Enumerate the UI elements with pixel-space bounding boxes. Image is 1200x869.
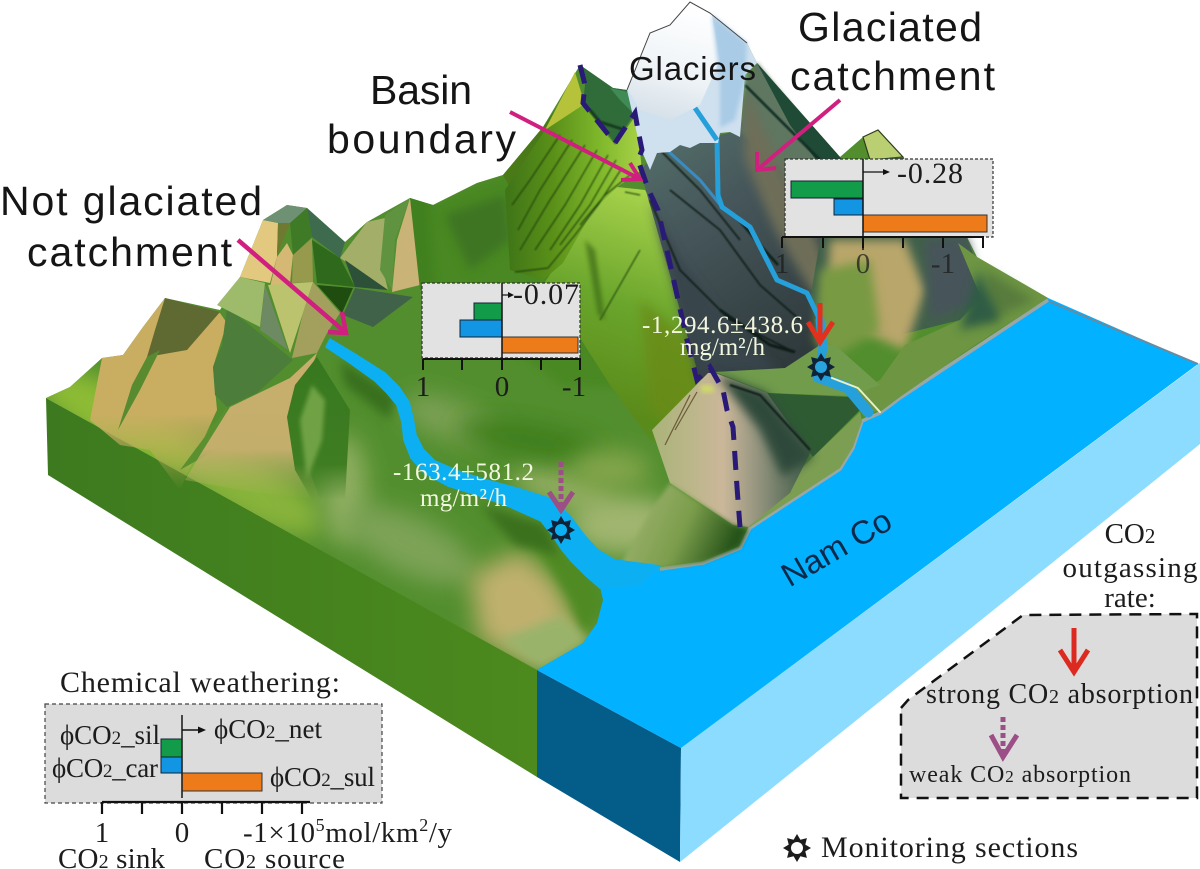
dark ridge lines bbox=[650, 85, 840, 352]
legend: chemical weathering: ϕCO2_net bbox=[214, 714, 322, 744]
chart: glaciated catchment weathering: -0.28 bbox=[897, 157, 963, 190]
heading: basin boundary: boundary bbox=[327, 116, 516, 162]
heading: glaciated catchment: catchment bbox=[790, 53, 996, 99]
legend: chemical weathering: 5 bbox=[316, 815, 325, 835]
slope gullies bbox=[512, 135, 640, 320]
land base bbox=[46, 2, 1048, 670]
heading: not glaciated catchment: Not glaciated bbox=[0, 178, 262, 224]
label: glaciated catchment CO2 rate: mg/m²/h bbox=[680, 334, 766, 361]
heading: glaciated catchment bbox=[790, 4, 996, 99]
heading: not glaciated catchment bbox=[0, 178, 262, 275]
heading: glaciated catchment: Glaciated bbox=[798, 4, 982, 50]
upper faceted peaks behind the river source bbox=[217, 198, 500, 358]
light blue right lake face bbox=[680, 363, 1200, 862]
central green mountain bbox=[430, 65, 700, 450]
icon: monitoring section star, not glaciated bbox=[547, 516, 575, 544]
legend: CO2 outgassing rate: CO2 bbox=[1105, 518, 1155, 550]
legend: monitoring sections: Monitoring sections bbox=[821, 831, 1078, 864]
left soil face bbox=[46, 398, 538, 777]
label: glaciated catchment CO2 rate: -1,294.6±438.6 bbox=[642, 312, 803, 339]
chart: glaciated catchment weathering: 0 bbox=[856, 248, 870, 280]
arrow: basin boundary bbox=[510, 112, 640, 180]
legend: chemical weathering: mol/km bbox=[325, 817, 419, 849]
panel: block side faces and lake bbox=[46, 298, 1200, 862]
label: not glaciated catchment CO2 rate bbox=[393, 459, 534, 512]
label: not glaciated catchment CO2 rate: -163.4±581.2 bbox=[393, 459, 534, 486]
legend: chemical weathering bbox=[45, 666, 452, 869]
front foothill bbox=[652, 373, 862, 527]
chart: glaciated catchment weathering: 1 bbox=[775, 248, 789, 280]
icon: weak absorption arrow on river bbox=[549, 462, 573, 510]
lake shore line bbox=[660, 300, 1048, 569]
legend: chemical weathering: 0 bbox=[175, 817, 189, 849]
glaciated mountain body bbox=[640, 63, 880, 380]
chart: not glaciated catchment weathering: -1 bbox=[562, 371, 586, 403]
heading: not glaciated catchment: catchment bbox=[27, 229, 233, 275]
lake surface bbox=[537, 298, 1198, 748]
legend: CO2 outgassing rate: rate: bbox=[1104, 582, 1156, 614]
label: not glaciated catchment CO2 rate: mg/m²/h bbox=[420, 485, 508, 512]
legend: chemical weathering: Chemical weathering: bbox=[60, 666, 340, 699]
arrow: glaciated catchment bbox=[757, 100, 840, 170]
river: not glaciated catchment bbox=[326, 339, 660, 588]
legend: chemical weathering: 2 bbox=[419, 815, 428, 835]
panel: terrain bbox=[22, 2, 1048, 670]
legend: CO2 outgassing rate bbox=[901, 518, 1198, 798]
legend: CO2 outgassing rate: strong CO2 absorption bbox=[926, 679, 1193, 710]
legend: chemical weathering: ϕCO2_sil bbox=[60, 720, 160, 750]
label: glaciated catchment CO2 rate bbox=[642, 312, 803, 361]
chart: not glaciated catchment weathering bbox=[416, 278, 586, 403]
legend: chemical weathering: ϕCO2_sul bbox=[270, 762, 375, 792]
heading: basin boundary: Basin bbox=[370, 67, 472, 113]
dark blue front lake face bbox=[537, 670, 681, 862]
legend: CO2 outgassing rate: outgassing bbox=[1062, 552, 1198, 584]
river: glaciated catchment bbox=[667, 140, 880, 412]
legend: chemical weathering: -1×10 bbox=[243, 817, 315, 849]
heading: basin boundary bbox=[327, 67, 516, 162]
lake back edge bbox=[1048, 301, 1198, 364]
legend: chemical weathering: ϕCO2_car bbox=[52, 753, 158, 783]
heading: glaciers: Glaciers bbox=[629, 50, 756, 87]
star meadow bbox=[715, 345, 880, 396]
chart: glaciated catchment weathering: -1 bbox=[931, 248, 955, 280]
chart: not glaciated catchment weathering: 0 bbox=[495, 371, 509, 403]
icon: strong absorption arrow on river bbox=[808, 303, 833, 342]
arrow: not glaciated catchment bbox=[238, 240, 346, 333]
right flank bbox=[810, 130, 1048, 412]
icon: monitoring section star, glaciated bbox=[807, 353, 835, 381]
left tan massif bbox=[90, 298, 350, 500]
basin boundary: dashed line bbox=[580, 65, 740, 527]
chart: glaciated catchment weathering bbox=[775, 157, 993, 280]
snow cap bbox=[627, 2, 757, 170]
legend: chemical weathering: /y bbox=[429, 817, 452, 849]
legend: CO2 outgassing rate: weak CO2 absorption bbox=[909, 762, 1131, 788]
soft colour bands on the valley floor bbox=[22, 349, 680, 668]
chart: not glaciated catchment weathering: -0.07 bbox=[513, 278, 579, 311]
legend: chemical weathering: 1 bbox=[95, 817, 109, 849]
chart: not glaciated catchment weathering: 1 bbox=[416, 371, 430, 403]
heading: Nam Co: Nam Co bbox=[775, 501, 898, 594]
green bowl below the foothill bbox=[620, 483, 748, 568]
